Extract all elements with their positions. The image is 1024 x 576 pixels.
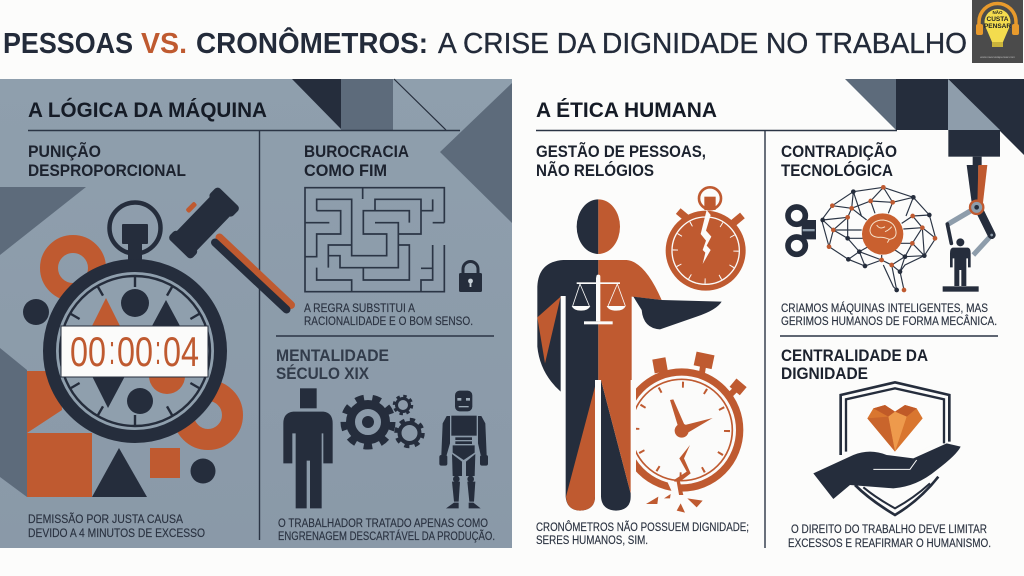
title: VS.	[141, 28, 187, 60]
caption: o direito do trabalho: O DIREITO DO TRABALHO DEVE LIMITAR	[791, 524, 987, 536]
caption: criamos máquinas	[781, 302, 997, 328]
section: burocracia como fim	[304, 143, 409, 180]
caption: o trabalhador: ENGRENAGEM DESCARTÁVEL DA PRODUÇÃO.	[278, 530, 495, 543]
icon: hammer	[167, 186, 291, 310]
caption: o direito do trabalho: EXCESSOS E REAFIRMAR O HUMANISMO.	[788, 538, 991, 550]
icon: faceted heart	[867, 405, 923, 452]
section: centralidade da dignidade: DIGNIDADE	[781, 365, 868, 383]
icon: human figure half dark half orange with scales	[537, 199, 722, 511]
caption: cronômetros: SERES HUMANOS, SIM.	[536, 535, 648, 547]
section: mentalidade século xix: MENTALIDADE	[276, 347, 389, 365]
section: punição desproporcional: PUNIÇÃO	[28, 141, 101, 161]
icon: brain network	[820, 185, 937, 292]
caption: a regra: A REGRA SUBSTITUI A	[304, 303, 415, 315]
decorative corner shapes	[292, 79, 512, 223]
caption: demissão: DEMISSÃO POR JUSTA CAUSA	[28, 513, 183, 526]
icon: open hand	[813, 443, 961, 499]
caption: cronômetros: CRONÔMETROS NÃO POSSUEM DIGNIDADE;	[536, 521, 749, 534]
geometric shapes behind stopwatch	[0, 187, 232, 497]
section: mentalidade século xix: SÉCULO XIX	[276, 364, 369, 383]
icon: stopwatch 00:00:04: 00	[70, 328, 106, 375]
logo: Não Custa Pensar: NÃO	[992, 9, 1003, 15]
title: A CRISE DA DIGNIDADE NO TRABALHO	[438, 28, 967, 60]
icon: stopwatch 00:00:04: 00	[117, 328, 153, 375]
section: contradição tecnológica: TECNOLÓGICA	[781, 161, 893, 180]
icon: stopwatch 00:00:04	[50, 202, 220, 436]
section: centralidade da dignidade: CENTRALIDADE DA	[781, 347, 928, 365]
caption: demissão	[28, 513, 205, 540]
panel: a ética humana	[536, 79, 1024, 550]
title	[3, 26, 967, 60]
title: CRONÔMETROS:	[196, 26, 428, 60]
section: gestão de pessoas: GESTÃO DE PESSOAS,	[536, 141, 706, 161]
icon: padlock	[459, 262, 482, 292]
icon: stopwatch 00:00:04: :	[155, 326, 161, 373]
icon: cracked stopwatch	[666, 187, 746, 291]
logo: Não Custa Pensar: www.naocustapensar.com	[980, 55, 1015, 59]
heading: a lógica da máquina: A LÓGICA DA MÁQUINA	[28, 98, 267, 122]
column rules	[28, 130, 494, 540]
decorative corner shapes	[845, 79, 1024, 155]
section: contradição tecnológica: CONTRADIÇÃO	[781, 141, 897, 161]
title: PESSOAS	[3, 28, 133, 60]
caption: a regra: RACIONALIDADE E O BOM SENSO.	[304, 316, 473, 328]
icon: scales of justice	[572, 275, 626, 324]
icon: wind-up key	[788, 207, 816, 254]
icon: gears	[344, 396, 422, 446]
logo: Não Custa Pensar: PENSAR	[984, 23, 1011, 30]
section: burocracia como fim: COMO FIM	[304, 162, 387, 180]
heading: a ética humana: A ÉTICA HUMANA	[536, 99, 717, 122]
caption: demissão: DEVIDO A 4 MINUTOS DE EXCESSO	[28, 528, 205, 540]
icon: robot arm holding worker	[943, 130, 1000, 292]
section: gestão de pessoas	[536, 141, 706, 180]
section: contradição tecnológica	[781, 141, 897, 180]
caption: a regra	[304, 303, 473, 328]
icon: worker figure	[283, 388, 333, 508]
icon: stopwatch 00:00:04: 04	[163, 328, 199, 375]
panel: a lógica da máquina	[0, 79, 512, 548]
caption: criamos máquinas: CRIAMOS MÁQUINAS INTELIGENTES, MAS	[781, 302, 988, 315]
caption: o direito do trabalho	[788, 524, 991, 550]
section: burocracia como fim: BUROCRACIA	[304, 143, 409, 161]
icon: broken stopwatch	[624, 352, 747, 513]
logo: Não Custa Pensar	[972, 0, 1023, 63]
caption: o trabalhador	[278, 518, 495, 543]
icon: stopwatch 00:00:04: :	[109, 326, 115, 373]
caption: cronômetros	[536, 521, 749, 547]
icon: maze	[305, 188, 444, 292]
caption: o trabalhador: O TRABALHADOR TRATADO APENAS COMO	[278, 518, 488, 530]
icon: shield with heart in hand	[813, 382, 961, 515]
icon: robot	[439, 391, 488, 508]
column rules	[536, 130, 998, 548]
section: mentalidade século xix	[276, 347, 389, 383]
logo: Não Custa Pensar: CUSTA	[987, 16, 1009, 23]
caption: criamos máquinas: GERIMOS HUMANOS DE FORMA MECÂNICA.	[781, 315, 997, 328]
section: punição desproporcional: DESPROPORCIONAL	[28, 162, 186, 180]
section: gestão de pessoas: NÃO RELÓGIOS	[536, 160, 654, 180]
section: centralidade da dignidade	[781, 347, 928, 383]
section: punição desproporcional	[28, 141, 186, 180]
